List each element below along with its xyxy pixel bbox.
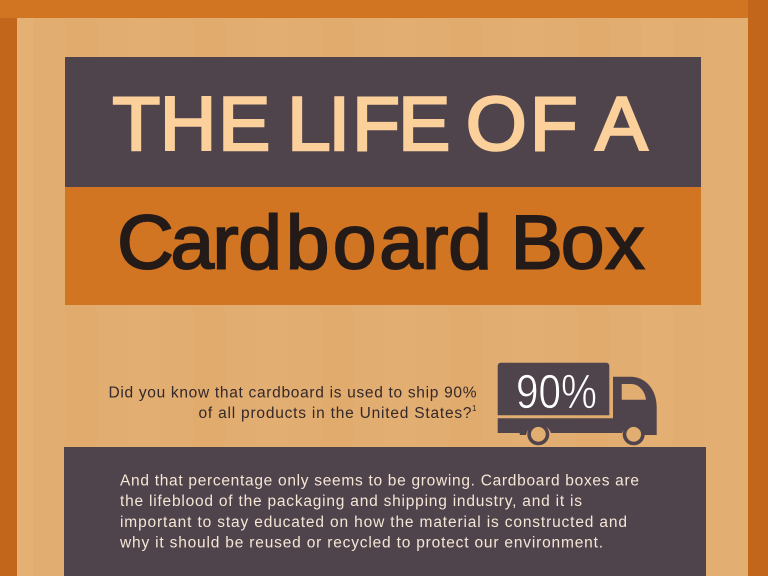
left box edge [0,0,17,576]
truck label: 90%: 90% [516,366,597,419]
title banner: THE LIFE OF A [65,57,701,187]
intro question text: 1 [472,404,477,413]
title banner: THE LIFE OF A: THE LIFE OF A [112,82,648,167]
top box flap [0,0,748,18]
intro question text: of all products in the United States? [198,405,472,422]
intro question text [108,384,477,422]
title banner: Cardboard Box [65,187,701,305]
icon: delivery truck with 90% [498,363,657,443]
panel: intro paragraph: the lifeblood of the packaging and shipping industry, and it is [120,493,582,510]
panel: intro paragraph [64,447,706,576]
title banner: Cardboard Box: Cardboard Box [117,200,645,285]
panel: intro paragraph: important to stay educated on how the material is constructed and [120,514,627,531]
intro question text: Did you know that cardboard is used to ship 90% [108,384,477,402]
panel: intro paragraph: why it should be reused or recycled to protect our environment. [119,535,603,552]
right box edge [748,0,768,576]
panel: intro paragraph: And that percentage only seems to be growing. Cardboard boxes are [120,473,639,490]
